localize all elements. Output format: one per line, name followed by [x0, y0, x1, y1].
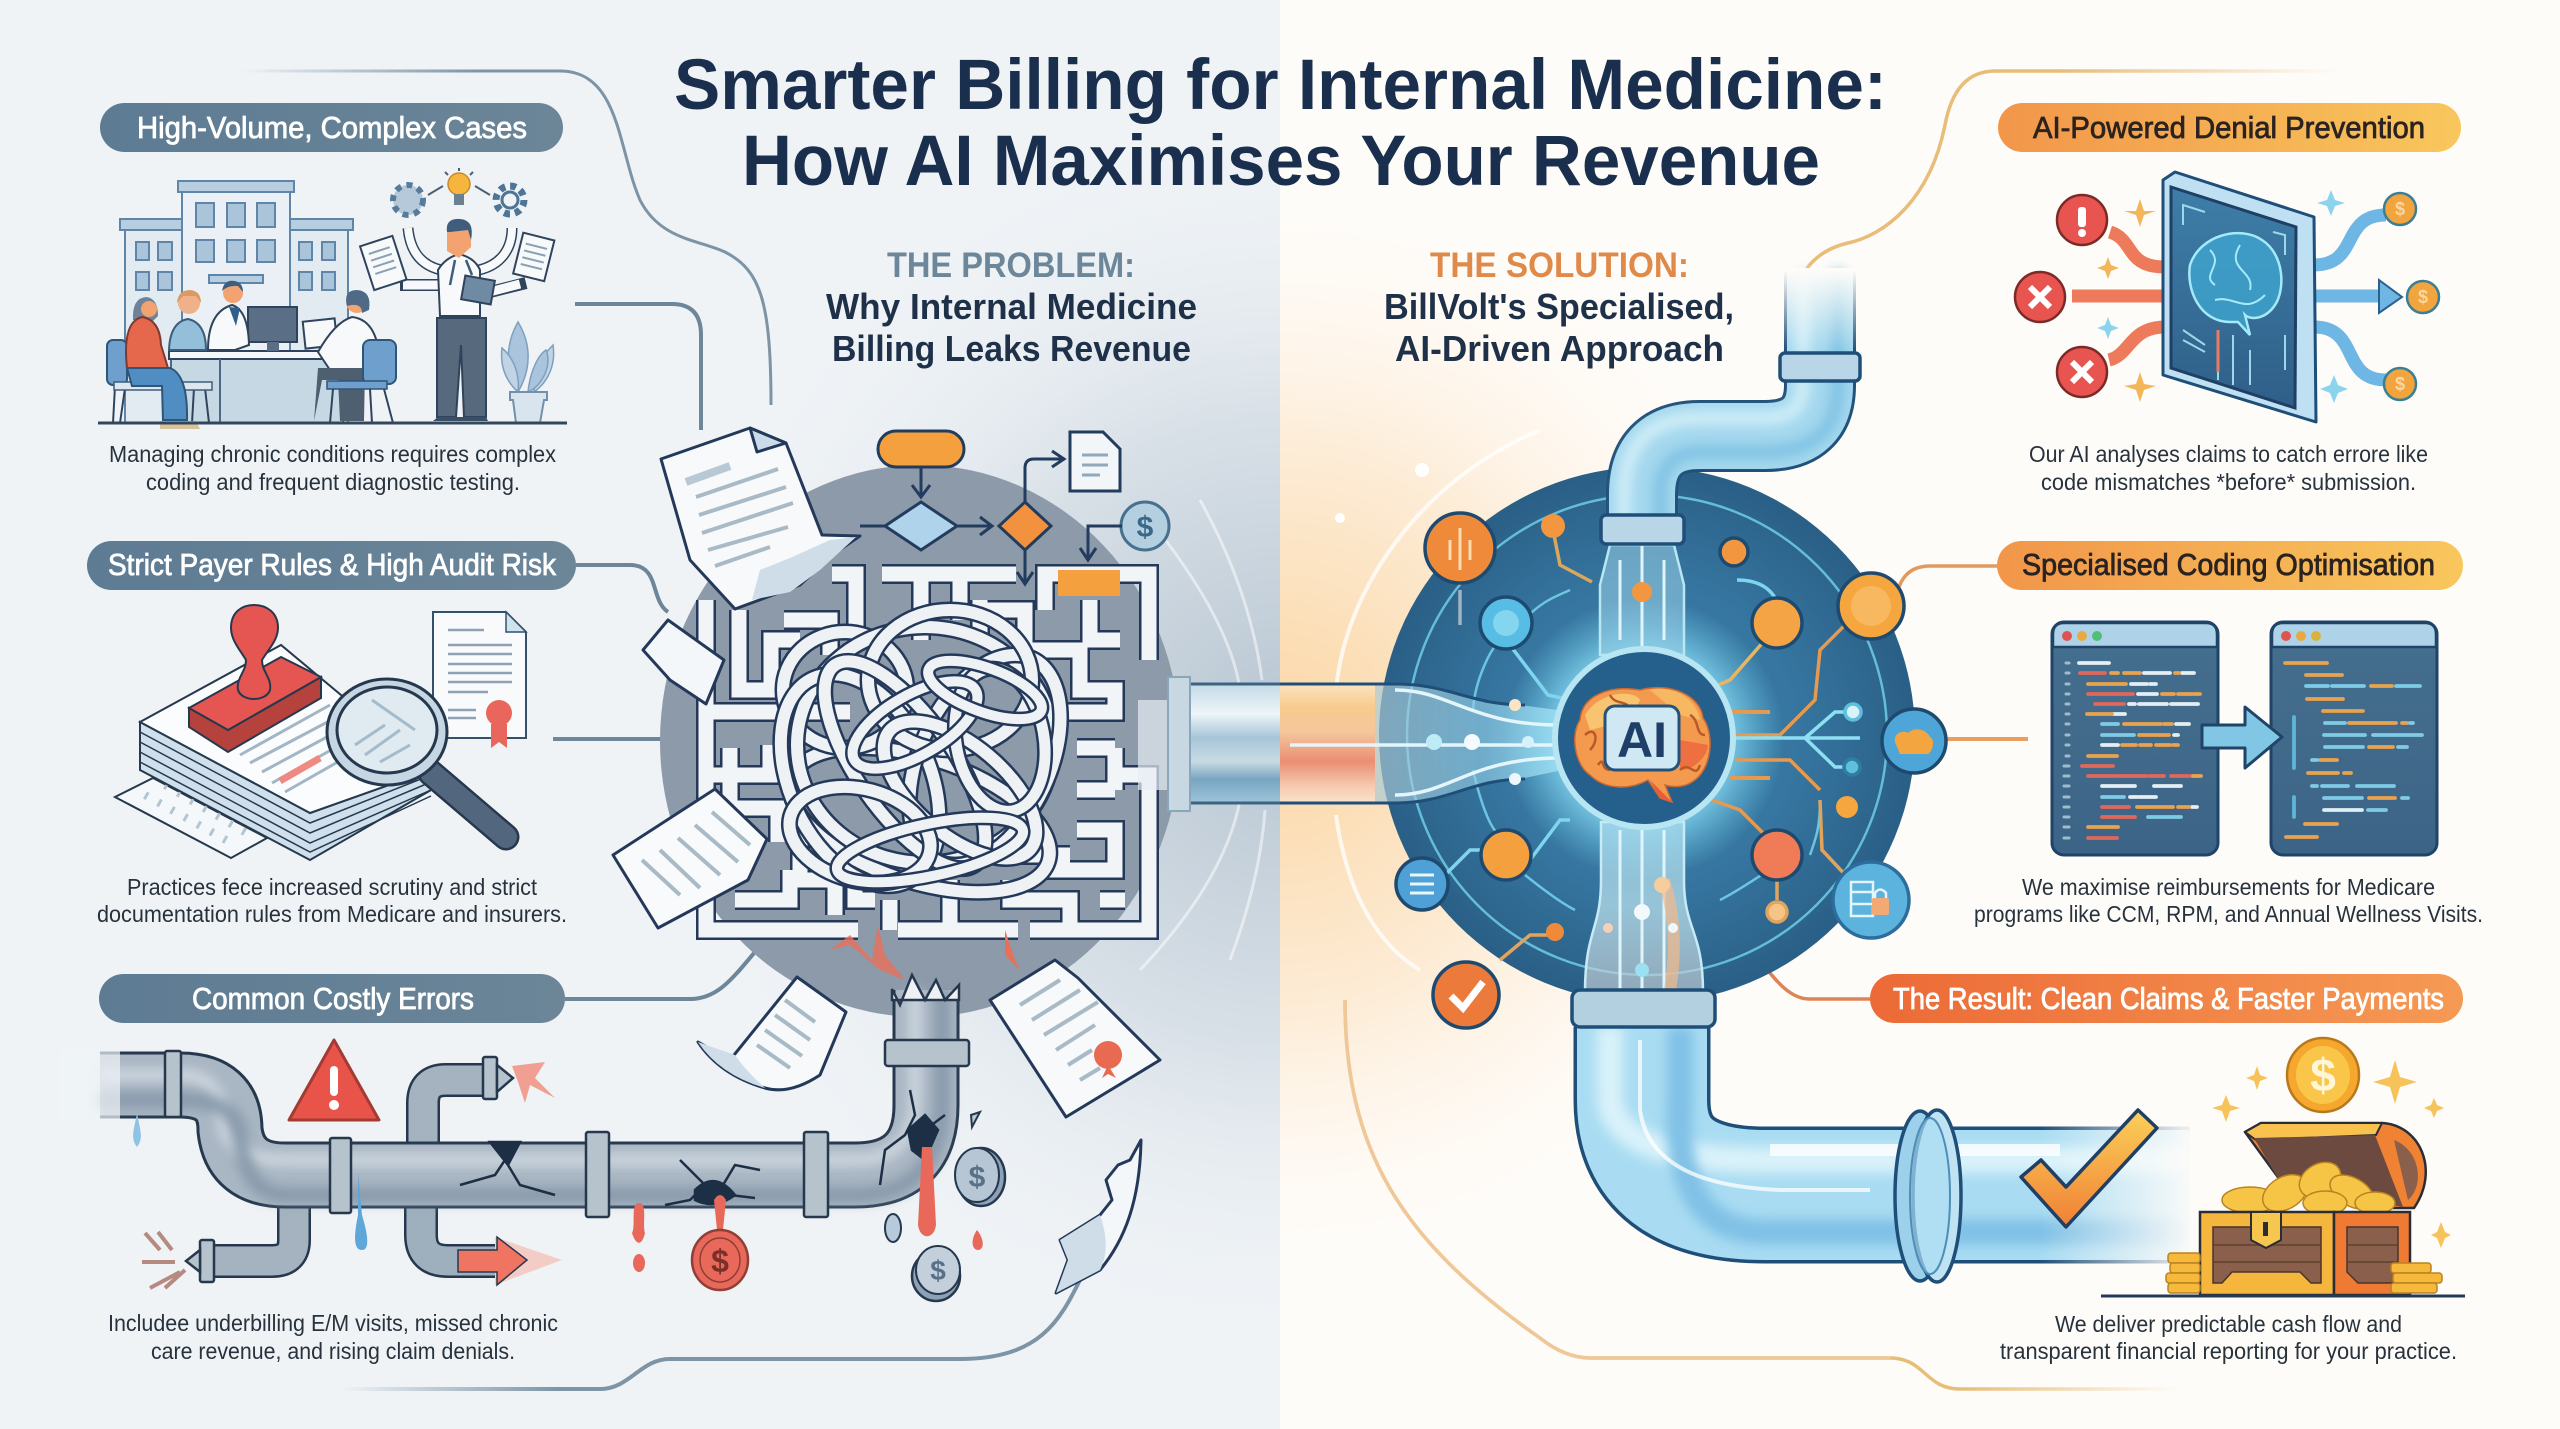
- icon: blue outputs: $: [2395, 199, 2405, 219]
- description: documentation rules from Medicare and insurers.: [97, 901, 567, 927]
- description: [108, 1310, 558, 1364]
- connector lines: problem side: [240, 71, 1080, 1389]
- illustration: plant: [502, 322, 554, 423]
- chart: AI engine circle: [1280, 430, 1946, 1028]
- heading: the problem: Why Internal Medicine: [826, 286, 1197, 327]
- pill heading: [87, 541, 576, 590]
- panel: the result: [1572, 974, 2465, 1364]
- pill heading: Strict Payer Rules & High Audit Risk: [108, 547, 556, 582]
- panel: specialised coding optimisation: [1974, 541, 2483, 927]
- illustration: certificate document: [433, 612, 526, 748]
- description: care revenue, and rising claim denials.: [151, 1338, 515, 1364]
- rings: [1407, 495, 1887, 975]
- illustration: overloaded doctor: [360, 168, 554, 421]
- flowchart: [860, 431, 1169, 596]
- description: [109, 441, 556, 495]
- icon: sparkles: [2097, 190, 2348, 403]
- heading: the solution: THE SOLUTION:: [1430, 246, 1689, 285]
- pipe collars: [1601, 353, 1860, 544]
- panel: strict payer rules: [87, 541, 576, 927]
- AI label: [1605, 706, 1679, 770]
- heading: the problem: Billing Leaks Revenue: [832, 328, 1191, 369]
- icon: magnifying glass: [327, 679, 506, 837]
- icon: grey coins: $: [969, 1161, 986, 1194]
- description: We maximise reimbursements for Medicare: [2022, 874, 2435, 900]
- maze walls: [706, 574, 1149, 930]
- icon: cloud node: [1882, 709, 1946, 773]
- icon: check node: [1433, 962, 1499, 1028]
- icon: red tears under maze: [830, 925, 905, 980]
- disc: [660, 465, 1180, 1017]
- pill heading: The Result: Clean Claims & Faster Payments: [1893, 981, 2444, 1016]
- AI label: AI: [1617, 712, 1667, 768]
- pill heading: [1997, 541, 2463, 590]
- decorative arcs: [1140, 500, 1265, 970]
- icon: cracks: [460, 1090, 945, 1205]
- icon: list node: [1396, 858, 1448, 910]
- illustration: desk scene: [107, 281, 396, 429]
- code window: after: [2271, 622, 2437, 855]
- icon: circuit node: [1425, 513, 1495, 583]
- icon: sparkles: [2212, 1060, 2451, 1248]
- pill heading: AI-Powered Denial Prevention: [2033, 110, 2425, 145]
- icon: dollar: $: [1137, 511, 1154, 544]
- chart: tangled maze circle: [613, 428, 1265, 1017]
- pipe flanges: [165, 975, 969, 1282]
- description: Includee underbilling E/M visits, missed chronic: [108, 1310, 558, 1336]
- icon: red inputs: [2015, 195, 2165, 397]
- pipe: problem side outflow: [1138, 677, 1280, 811]
- description: [2029, 441, 2428, 495]
- icon: red coin: [692, 1230, 748, 1290]
- description: programs like CCM, RPM, and Annual Wellness Visits.: [1974, 901, 2483, 927]
- flange: [1895, 1110, 1961, 1282]
- pill heading: [99, 974, 565, 1023]
- title: How AI Maximises Your Revenue: [742, 122, 1820, 201]
- pipe: clean output: [1610, 1027, 2200, 1270]
- icon: blue outputs: $: [2418, 287, 2428, 307]
- pill heading: High-Volume, Complex Cases: [137, 110, 527, 145]
- icon: gold coin: $: [2310, 1049, 2336, 1101]
- title: Smarter Billing for Internal Medicine:: [674, 46, 1887, 125]
- input funnel: [1280, 684, 1572, 803]
- icon: warning triangle: [289, 1040, 379, 1120]
- icon: brain: [1575, 688, 1710, 802]
- heading: the problem: THE PROBLEM:: [887, 246, 1135, 285]
- panel: high-volume complex cases: [98, 103, 567, 495]
- papers around broken pipe: [698, 960, 1160, 1293]
- background: problem half: [0, 0, 1280, 1429]
- description: coding and frequent diagnostic testing.: [146, 469, 520, 495]
- icon: blue outputs: [2314, 193, 2439, 400]
- illustration: paper stack and stamp: [115, 605, 431, 860]
- heading: the problem: [826, 246, 1197, 369]
- heading: the solution: BillVolt's Specialised,: [1384, 286, 1734, 327]
- pill heading: Common Costly Errors: [192, 981, 474, 1016]
- icon: check mark: [2021, 1110, 2157, 1227]
- description: Practices fece increased scrutiny and strict: [127, 874, 538, 900]
- decorative arcs: [1335, 430, 1540, 970]
- pill heading: [100, 103, 563, 152]
- icon: grey coins: [912, 1148, 1005, 1301]
- arrow: optimise: [2202, 707, 2282, 768]
- pipe: clean upper flow: [1624, 268, 1900, 520]
- icon: treasure chest: [2200, 1123, 2426, 1295]
- AI hub: [1555, 649, 1733, 827]
- nodes: [1396, 513, 1946, 1028]
- knot: [749, 610, 1091, 921]
- circuit traces: [1440, 530, 1860, 960]
- pill heading: [1870, 974, 2463, 1023]
- icon: AI scanner tablet: [2163, 172, 2316, 422]
- description: We deliver predictable cash flow and: [2055, 1311, 2402, 1337]
- icon: flying papers: [613, 428, 860, 928]
- description: transparent financial reporting for your practice.: [2000, 1338, 2457, 1364]
- description: code mismatches *before* submission.: [2041, 469, 2416, 495]
- illustration: hospital: [120, 181, 353, 423]
- panel: AI-powered denial prevention: [1998, 103, 2461, 495]
- icon: records node: [1833, 862, 1909, 938]
- icon: red coin: $: [711, 1243, 729, 1279]
- icon: red arrow and sprays: [142, 1062, 562, 1288]
- description: Our AI analyses claims to catch errore like: [2029, 441, 2428, 467]
- code window: before: [2052, 622, 2218, 855]
- connector lines: solution side: [1345, 71, 2340, 1389]
- heading: the solution: AI-Driven Approach: [1395, 328, 1724, 369]
- description: [2000, 1311, 2457, 1364]
- pill heading: Specialised Coding Optimisation: [2022, 547, 2435, 582]
- icon: coin stacks: [2166, 1253, 2442, 1293]
- icon: grey coins: $: [930, 1255, 946, 1286]
- vertical pipe segments: [1585, 545, 1703, 992]
- hub glow: [1504, 598, 1784, 878]
- icon: blue outputs: $: [2395, 374, 2405, 394]
- illustration: leaking pipes: [60, 990, 942, 1261]
- description: Managing chronic conditions requires complex: [109, 441, 556, 467]
- icon: gold coin: [2287, 1038, 2359, 1112]
- background: solution half: [1280, 0, 2560, 1429]
- title: [674, 46, 1887, 201]
- panel: common costly errors: [60, 960, 1160, 1364]
- description: [97, 874, 567, 927]
- icon: blue and red drips: [133, 1112, 983, 1272]
- pill heading: [1998, 103, 2461, 152]
- disc: [1379, 467, 1915, 1003]
- heading: the solution: [1384, 246, 1734, 369]
- description: [1974, 874, 2483, 927]
- collar: [1572, 990, 1715, 1027]
